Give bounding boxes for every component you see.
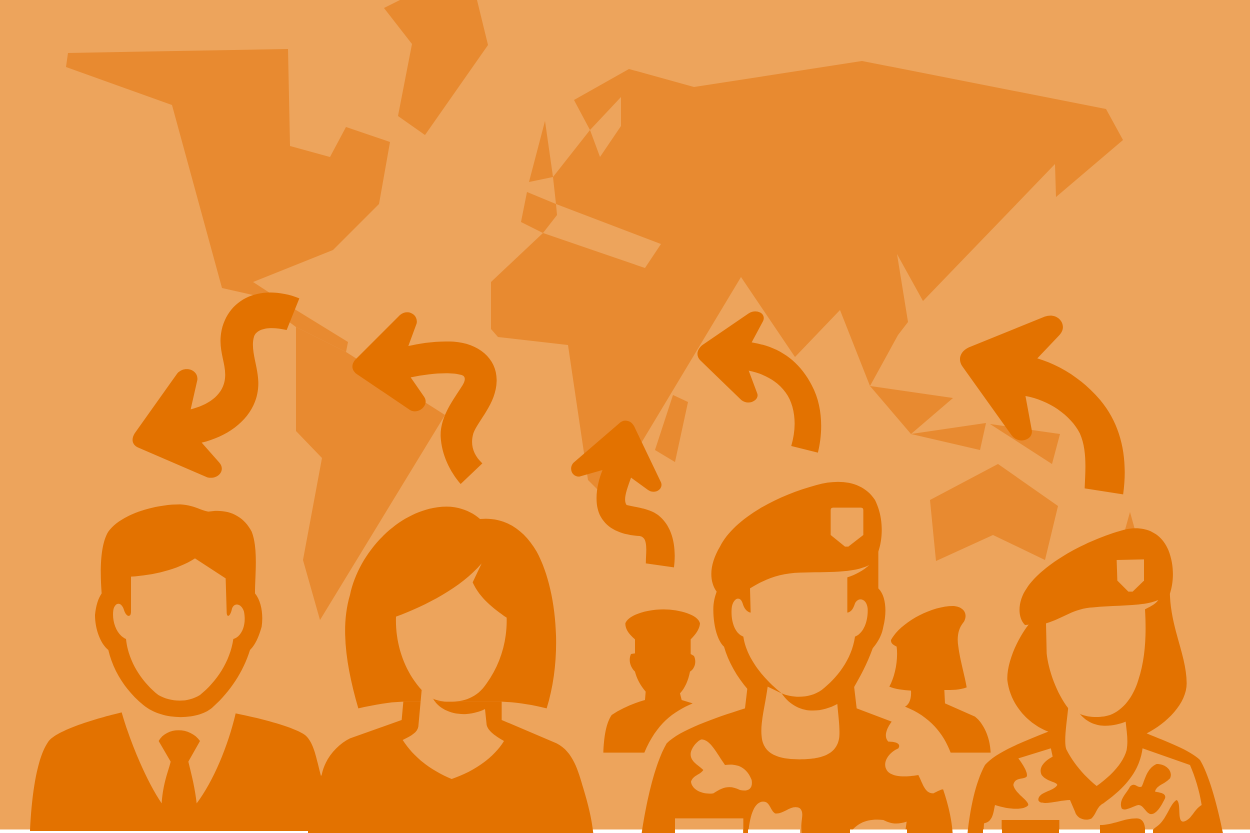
woman face xyxy=(396,563,507,702)
arrow: far right curved xyxy=(960,316,1125,494)
person: male soldier in beret xyxy=(642,482,953,833)
soldier beret and head xyxy=(711,482,885,710)
person: woman with bob hair xyxy=(308,507,593,833)
person: female soldier in beret xyxy=(967,528,1223,833)
female soldier hair xyxy=(1007,553,1187,733)
map: indonesia xyxy=(870,386,953,434)
man jacket and tie xyxy=(30,712,322,831)
arrow: centre right curved xyxy=(697,311,821,453)
man face xyxy=(113,558,245,701)
soldier camo patches xyxy=(675,739,907,833)
map: north america xyxy=(66,49,390,352)
female soldier camo blobs xyxy=(1002,764,1171,833)
arrows xyxy=(133,293,1125,567)
female soldier neck xyxy=(1065,707,1127,786)
female soldier collar and camo xyxy=(1038,747,1143,820)
map: iberia fragment xyxy=(521,192,557,233)
soldier face xyxy=(732,565,869,697)
female soldier shirt panel xyxy=(983,748,1202,833)
map: british isles xyxy=(529,121,553,182)
woman body xyxy=(308,702,593,833)
person: small soldier xyxy=(603,609,700,753)
map: madagascar xyxy=(655,395,688,462)
soldier neck xyxy=(761,687,839,759)
female soldier beret badge xyxy=(1117,559,1144,592)
female soldier body xyxy=(967,714,1223,833)
man hair and head xyxy=(95,504,262,717)
map: small island xyxy=(1125,512,1135,530)
map: eurasia and africa xyxy=(491,61,1123,492)
map: south america xyxy=(296,327,445,620)
world map xyxy=(66,0,1135,620)
bottom edge strip xyxy=(675,830,1153,833)
person: small female soldier xyxy=(889,606,991,753)
soldier beret badge xyxy=(831,508,863,547)
arrow: second wavy xyxy=(352,312,497,484)
woman neck xyxy=(403,690,504,779)
female soldier beret xyxy=(1020,528,1173,625)
female soldier face xyxy=(1046,600,1158,717)
map: australia xyxy=(930,464,1058,561)
soldier body xyxy=(642,680,953,833)
arrow: centre wavy xyxy=(571,421,675,567)
person: man in suit xyxy=(30,504,322,831)
map: islands xyxy=(911,423,986,450)
woman hair xyxy=(345,507,556,708)
arrow: left curved xyxy=(133,293,299,478)
map: new guinea xyxy=(990,424,1060,464)
map: greenland xyxy=(384,0,488,135)
